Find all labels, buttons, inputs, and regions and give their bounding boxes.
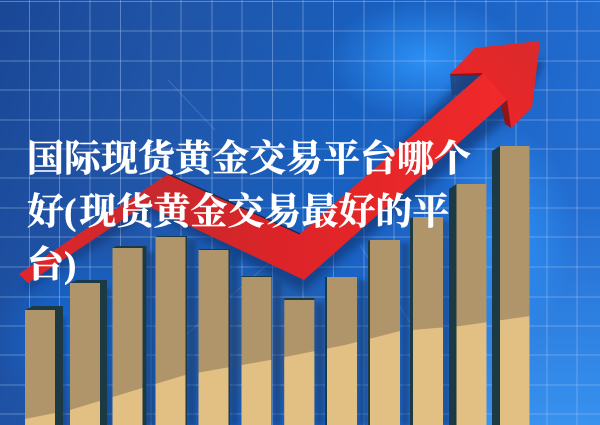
title [27,139,471,286]
title: 台) [27,245,76,286]
bars [25,146,530,425]
title: 国际现货黄金交易平台哪个 [27,139,471,180]
bar shadows [60,221,449,425]
red arrow [19,41,540,283]
arrow shadow [22,60,545,292]
title: 好(现货黄金交易最好的平 [27,192,449,233]
bar sides [25,146,500,425]
